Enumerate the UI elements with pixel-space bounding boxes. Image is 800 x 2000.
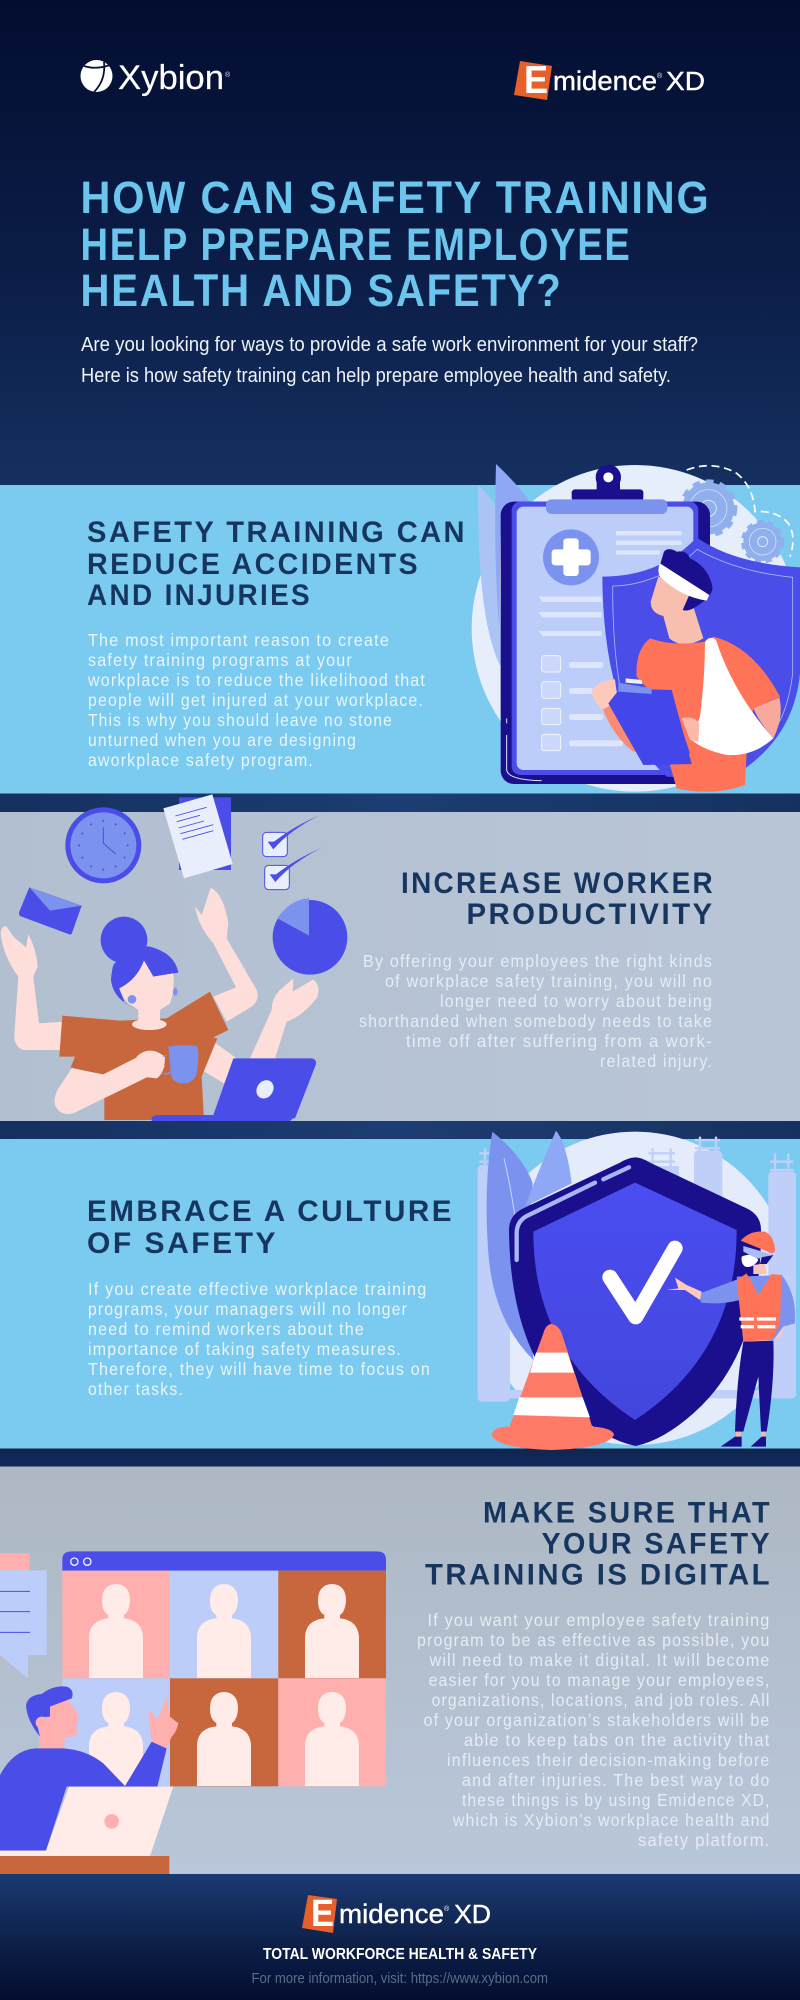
body text: panel 3: need to remind workers about the	[88, 1319, 365, 1339]
body text: panel 2: By offering your employees the right kinds	[363, 951, 713, 971]
heading: make sure safety training is digital: MAKE SURE THAT	[483, 1496, 772, 1530]
heading: make sure safety training is digital	[425, 1496, 772, 1592]
footer background	[0, 1874, 800, 2000]
body text: panel 1: unturned when you are designing	[88, 730, 357, 750]
logo: Emidence XD footer	[302, 1893, 491, 1935]
heading: safety training can reduce accidents: AND INJURIES	[87, 579, 312, 612]
clipboard	[501, 465, 710, 784]
heading: embrace a culture of safety: EMBRACE A CULTURE	[87, 1195, 454, 1228]
logo: Emidence XD footer: ®	[444, 1905, 450, 1913]
body text: panel 4	[417, 1610, 770, 1850]
traffic cone	[492, 1324, 614, 1450]
logo: Emidence XD top: ®	[657, 72, 663, 80]
logo: Xybion: Xybion	[118, 59, 224, 97]
title: HOW CAN SAFETY TRAINING	[80, 172, 710, 223]
envelope	[19, 887, 82, 934]
clock	[65, 807, 141, 883]
body text: panel 4: will need to make it digital. It will become	[429, 1650, 770, 1670]
heading: make sure safety training is digital: YOUR SAFETY	[542, 1528, 772, 1560]
heading: increase worker productivity	[401, 867, 715, 931]
body text: panel 2: related injury.	[600, 1051, 713, 1071]
shield	[602, 537, 800, 780]
heading: safety training can reduce accidents: REDUCE ACCIDENTS	[87, 548, 420, 581]
body text: panel 3: If you create effective workplace training	[88, 1279, 428, 1299]
illustration: safety shield, cone and worker	[478, 1131, 796, 1450]
panel: reduce accidents and injuries	[0, 485, 800, 794]
woman	[1, 888, 319, 1120]
body text: panel 3: programs, your managers will no longer	[88, 1299, 408, 1319]
body text: panel 2: shorthanded when somebody needs to take	[359, 1011, 713, 1031]
body text: panel 4: influences their decision-making before	[447, 1750, 770, 1770]
panel background blue	[0, 1139, 800, 1448]
chat bubble	[0, 1553, 47, 1678]
body text: panel 4: of your organization’s stakeholders will be	[424, 1710, 770, 1730]
heading: embrace a culture of safety	[87, 1195, 454, 1260]
body text: panel 1	[87, 630, 426, 770]
body text: panel 1: The most important reason to create	[88, 630, 390, 650]
panel background blue	[0, 485, 800, 794]
panel: embrace a culture of safety	[0, 1139, 800, 1448]
background: page header gradient	[0, 0, 800, 486]
body text: panel 2: longer need to worry about being	[440, 991, 713, 1011]
illustration: multitasking woman	[1, 794, 347, 1121]
logo: Emidence XD top: midence	[553, 66, 657, 96]
document	[163, 794, 233, 878]
heading: safety training can reduce accidents: SAFETY TRAINING CAN	[87, 516, 467, 549]
body text: panel 4: organizations, locations, and job roles. All	[432, 1690, 770, 1710]
body text: panel 4: able to keep tabs on the activity that	[464, 1730, 770, 1750]
heading: increase worker productivity: PRODUCTIVITY	[466, 898, 714, 931]
video window	[62, 1551, 386, 1786]
shield	[509, 1157, 761, 1446]
logo: Emidence XD top: E	[524, 59, 548, 102]
body text: panel 1: This is why you should leave no stone	[88, 710, 393, 730]
body text: panel 1: workplace is to reduce the likelihood that	[87, 670, 426, 690]
body text: panel 4: easier for you to manage your employees,	[429, 1670, 770, 1690]
body text: panel 3: Therefore, they will have time to focus on	[88, 1359, 431, 1379]
illustration: video call with trainer	[0, 1551, 386, 1874]
illustration: clipboard and injured worker	[472, 464, 800, 792]
logo: Emidence XD top: XD	[666, 66, 705, 96]
logo: Emidence XD footer: XD	[454, 1899, 491, 1929]
trainer	[0, 1686, 178, 1851]
logo: Emidence XD footer: E	[311, 1893, 334, 1935]
body text: panel 4: If you want your employee safety training	[428, 1610, 770, 1630]
panel: make sure safety training is digital	[0, 1466, 800, 1874]
body text: panel 1: people will get injured at your workplace.	[88, 690, 424, 710]
leaves	[487, 1131, 572, 1360]
heading: make sure safety training is digital: TRAINING IS DIGITAL	[425, 1558, 772, 1592]
laptop and desk	[0, 1787, 173, 1874]
footer	[0, 1874, 800, 2000]
gears	[682, 466, 793, 561]
background: divider strip 3	[0, 1448, 800, 1467]
background buildings	[478, 1137, 796, 1402]
background: divider strip 2	[0, 1121, 800, 1140]
panel background grey	[0, 1466, 800, 1874]
website line: For more information, visit: https://www.xybion.com	[252, 1970, 548, 1987]
checkboxes	[263, 815, 322, 890]
body text: panel 4: program to be as effective as possible, you	[417, 1630, 770, 1650]
pie chart	[273, 898, 347, 975]
heading: safety training can reduce accidents	[87, 516, 467, 612]
panel: increase worker productivity	[0, 812, 800, 1121]
panel background grey	[0, 812, 800, 1121]
body text: panel 4: which is Xybion’s workplace health and	[452, 1810, 770, 1830]
laptop	[152, 1058, 316, 1121]
body text: panel 1: aworkplace safety program.	[88, 750, 314, 770]
heading: increase worker productivity: INCREASE WORKER	[401, 867, 715, 900]
body text: panel 4: safety platform.	[638, 1830, 770, 1850]
body text: panel 3	[88, 1279, 431, 1399]
body text: panel 1: safety training programs at your	[88, 650, 353, 670]
intro text	[81, 333, 698, 387]
body text: panel 2: time off after suffering from a work-	[406, 1031, 713, 1051]
body text: panel 3: importance of taking safety measures.	[88, 1339, 402, 1359]
body text: panel 3: other tasks.	[88, 1379, 184, 1399]
logo: Xybion: ®	[225, 71, 231, 79]
title: HELP PREPARE EMPLOYEE	[80, 219, 632, 270]
title: HEALTH AND SAFETY?	[80, 265, 562, 316]
body text: panel 2	[359, 951, 713, 1071]
injured worker	[592, 549, 781, 792]
background: divider strip 1	[0, 793, 800, 813]
intro text: Are you looking for ways to provide a safe work environment for your staff?	[81, 333, 698, 356]
worker	[666, 1231, 795, 1447]
tagline: TOTAL WORKFORCE HEALTH & SAFETY	[263, 1946, 537, 1963]
logo: Emidence XD footer: midence	[339, 1899, 444, 1929]
heading: embrace a culture of safety: OF SAFETY	[87, 1227, 278, 1260]
intro text: Here is how safety training can help prepare employee health and safety.	[81, 364, 671, 387]
logo: Xybion	[80, 59, 231, 97]
title	[80, 172, 710, 316]
logo: Emidence XD top	[514, 59, 705, 102]
body text: panel 2: of workplace safety training, you will no	[385, 971, 713, 991]
body text: panel 4: these things is by using Emidence XD,	[462, 1790, 770, 1810]
body text: panel 4: and after injuries. The best way to do	[462, 1770, 770, 1790]
